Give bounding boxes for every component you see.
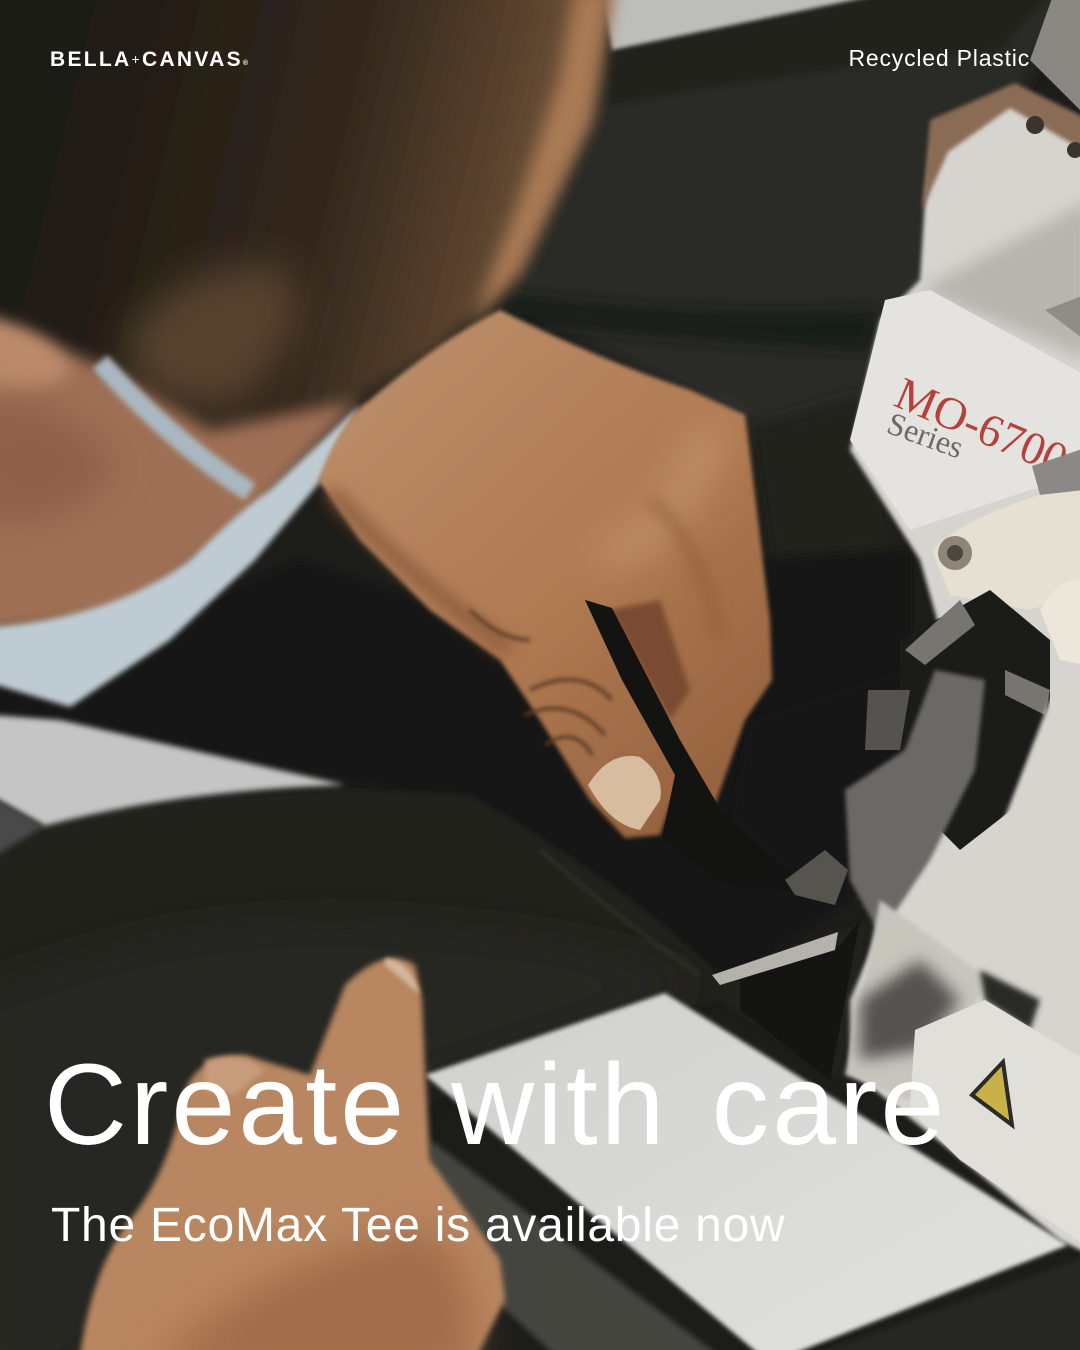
face: [0, 312, 360, 635]
face mask: [0, 362, 360, 707]
head and hair: [0, 0, 615, 430]
subheading: The EcoMax Tee is available now: [51, 1199, 785, 1252]
table top left: [0, 714, 345, 826]
main hand: [318, 310, 772, 838]
white box: [425, 993, 1080, 1350]
headline: Create with care: [44, 1041, 947, 1169]
black tee fabric: [0, 550, 1040, 1350]
sewing machine body: Series: [883, 405, 968, 465]
category label: Recycled Plastic: [848, 45, 1030, 71]
fabric fold held between fingers: [585, 600, 800, 892]
warning triangle: [972, 1062, 1012, 1125]
lower hand: [78, 958, 505, 1350]
sewing machine body: [712, 0, 1080, 1260]
logo: Bella+Canvas: BELLA+CANVAS®: [50, 48, 248, 71]
machine label: MO-6700: [888, 367, 1075, 485]
